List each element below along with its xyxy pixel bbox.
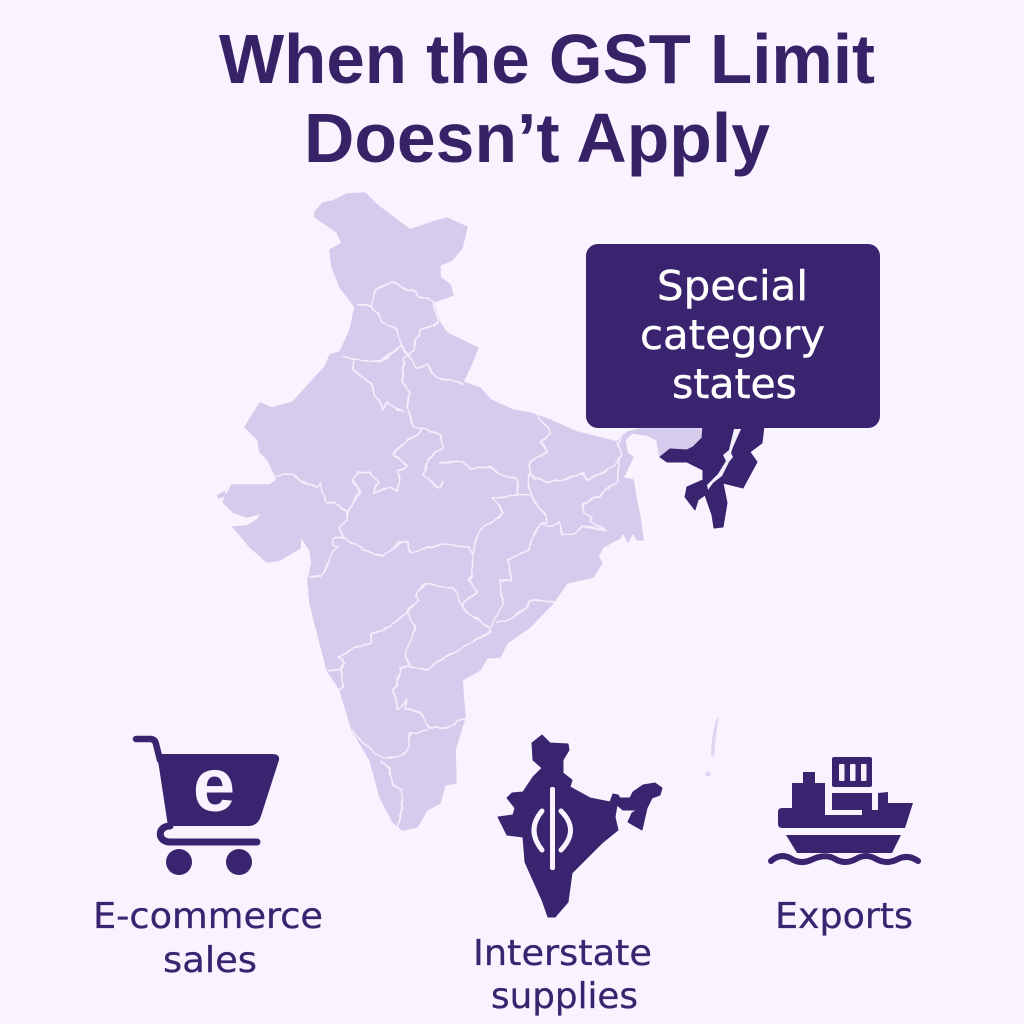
highlighted special category states: [660, 426, 764, 528]
map of India: [217, 193, 719, 830]
label: interstate supplies: Interstate: [473, 933, 652, 974]
callout: special category states: [586, 244, 880, 428]
icon: export ship: [771, 757, 918, 862]
icon: e-commerce cart: e: [193, 743, 235, 828]
Kutch islet: [217, 491, 226, 499]
label: exports: Exports: [775, 896, 913, 937]
title: [219, 20, 875, 177]
icon: e-commerce cart: [136, 739, 279, 875]
label: e-commerce sales: E-commerce: [93, 896, 323, 937]
callout: special category states: states: [672, 360, 797, 408]
callout: special category states: category: [640, 311, 825, 359]
label: e-commerce sales: sales: [163, 940, 257, 981]
mainland map shape: [223, 193, 703, 830]
northeast internal border: [707, 429, 741, 490]
Andaman and Nicobar islands: [706, 716, 719, 776]
label: interstate supplies: supplies: [491, 976, 638, 1017]
northeast states shape: [660, 426, 764, 528]
state borders: [275, 282, 623, 828]
icon: interstate India map: [498, 735, 662, 917]
title: Doesn’t Apply: [304, 99, 770, 177]
label: e-commerce sales: [93, 896, 323, 981]
title: When the GST Limit: [219, 20, 875, 98]
label: interstate supplies: [473, 933, 652, 1017]
callout: special category states: Special: [657, 262, 808, 310]
